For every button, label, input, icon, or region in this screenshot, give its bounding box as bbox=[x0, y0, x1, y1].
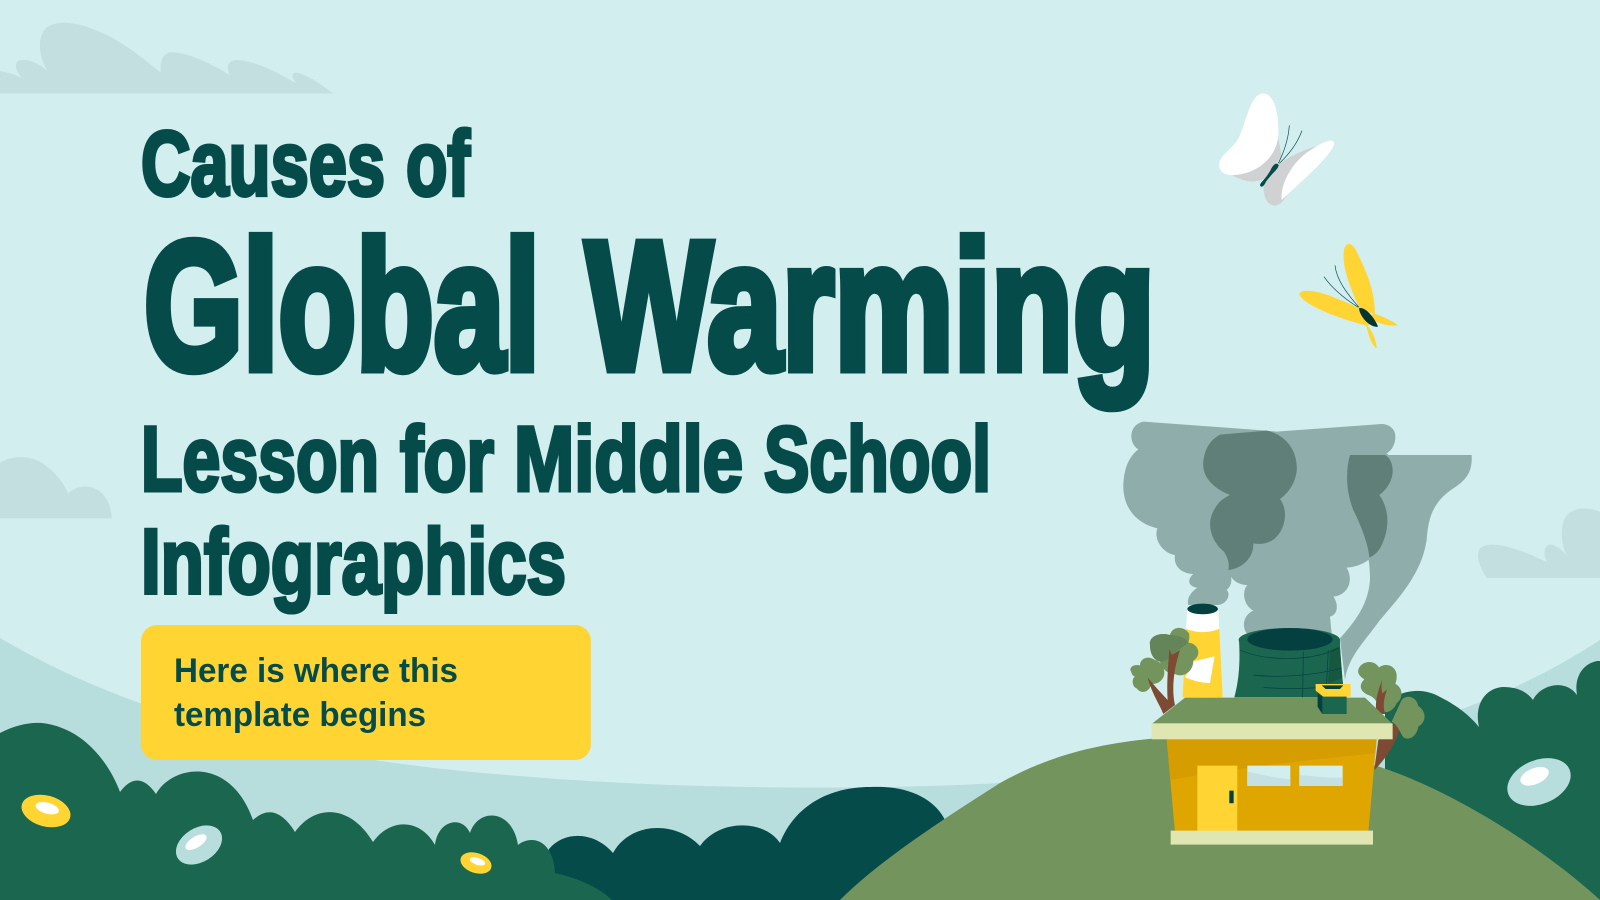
cloud: top left bbox=[0, 23, 333, 93]
title line: Causes of: Causes bbox=[141, 113, 385, 215]
flower: yellow large bbox=[18, 790, 74, 832]
eave band bbox=[1152, 723, 1393, 739]
bush: dark centre bbox=[540, 787, 945, 900]
smoke plumes bbox=[1123, 422, 1472, 680]
flower: pale right bbox=[1500, 749, 1578, 815]
bush: green right bbox=[1385, 661, 1600, 900]
subtitle callout bbox=[141, 625, 591, 760]
title line: Lesson for Middle School: Middle bbox=[514, 408, 743, 510]
chimney bbox=[1183, 604, 1223, 697]
flower: yellow small bbox=[458, 849, 494, 877]
band: pale hill horizon bbox=[0, 638, 1600, 900]
title line: Global Warming: Global bbox=[144, 203, 540, 408]
subtitle callout: Here is where this bbox=[174, 652, 458, 690]
factory bbox=[1130, 604, 1425, 845]
cloud: mid right bbox=[1478, 508, 1600, 578]
title line: Causes of: of bbox=[406, 113, 470, 215]
roof bbox=[1152, 698, 1393, 724]
tree: right bbox=[1358, 662, 1425, 770]
door bbox=[1197, 766, 1237, 832]
title line: Lesson for Middle School: for bbox=[400, 408, 494, 510]
butterfly: white bbox=[1219, 93, 1334, 206]
cooling tower bbox=[1234, 628, 1345, 697]
title bbox=[141, 113, 1155, 613]
tree: left bbox=[1130, 628, 1198, 714]
cloud: mid left bbox=[0, 457, 112, 518]
roof vent box bbox=[1316, 684, 1351, 714]
title line: Infographics: Infographics bbox=[141, 511, 566, 613]
building wall bbox=[1167, 739, 1377, 833]
window left bbox=[1247, 766, 1290, 786]
subtitle callout: template begins bbox=[174, 696, 426, 734]
bush: green left bbox=[0, 723, 612, 900]
title line: Global Warming: Warming bbox=[586, 203, 1155, 408]
flower: pale left bbox=[169, 817, 229, 873]
base plinth bbox=[1171, 831, 1373, 845]
butterfly: yellow bbox=[1299, 244, 1398, 348]
title line: Lesson for Middle School: School bbox=[764, 408, 991, 510]
window right bbox=[1299, 766, 1343, 786]
title line: Lesson for Middle School: Lesson bbox=[141, 408, 379, 510]
green hill bbox=[840, 737, 1600, 900]
